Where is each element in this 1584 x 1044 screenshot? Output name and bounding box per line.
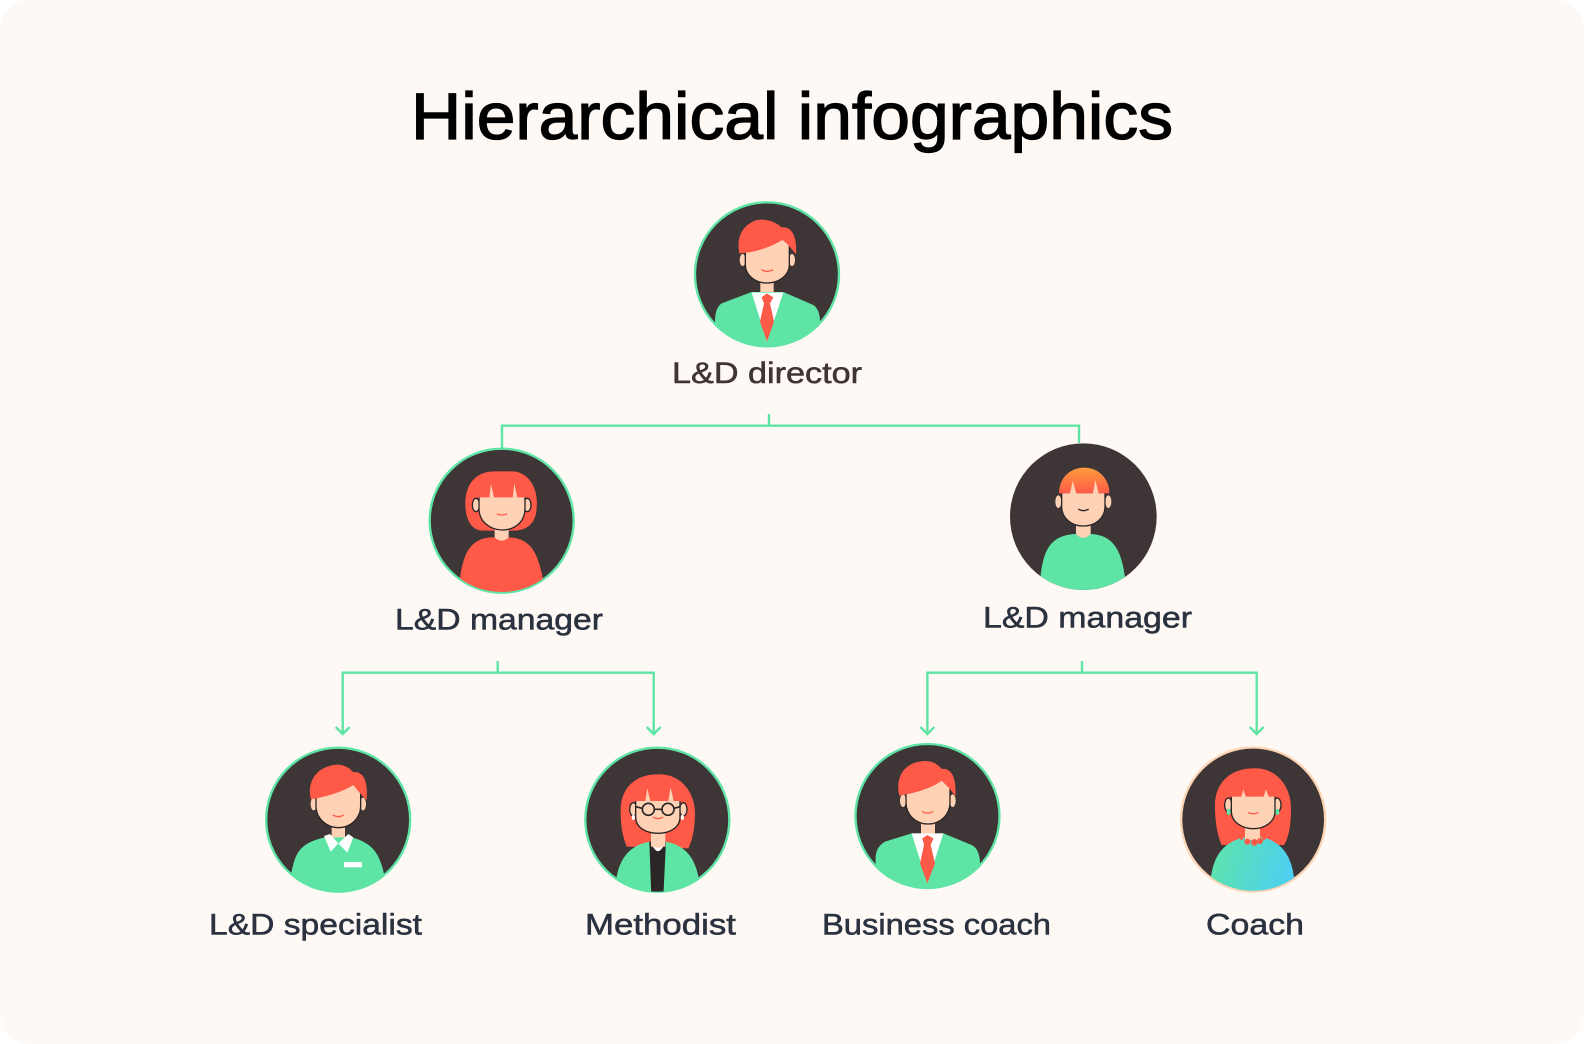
title: Hierarchical infographics — [411, 79, 1173, 153]
connector: left manager to specialist and methodist — [336, 661, 661, 734]
label: Methodist: Methodist — [585, 908, 737, 942]
connector: right manager to business coach and coach — [920, 661, 1264, 734]
label: L&D specialist: L&D specialist — [209, 908, 423, 942]
avatar: manager right — [1010, 443, 1157, 593]
avatar: methodist — [585, 748, 729, 903]
label: Business coach: Business coach — [822, 908, 1051, 942]
label: Coach: Coach — [1206, 908, 1304, 942]
node: L&D director — [672, 202, 862, 390]
connector: director to managers — [502, 414, 1079, 448]
avatar: manager left — [430, 449, 574, 593]
avatar: specialist — [266, 748, 410, 903]
node: L&D specialist — [209, 748, 423, 942]
node: Coach — [1181, 747, 1325, 942]
label: L&D manager right: L&D manager — [983, 602, 1192, 634]
label: L&D director: L&D director — [672, 357, 862, 390]
avatar: business coach — [855, 744, 999, 897]
avatar: director — [695, 202, 839, 357]
avatar: coach — [1181, 747, 1325, 903]
node: Business coach — [822, 744, 1051, 942]
node: L&D manager right — [983, 443, 1192, 634]
node: Methodist — [585, 748, 737, 942]
label: L&D manager left: L&D manager — [395, 604, 603, 636]
node: L&D manager left — [395, 449, 603, 636]
